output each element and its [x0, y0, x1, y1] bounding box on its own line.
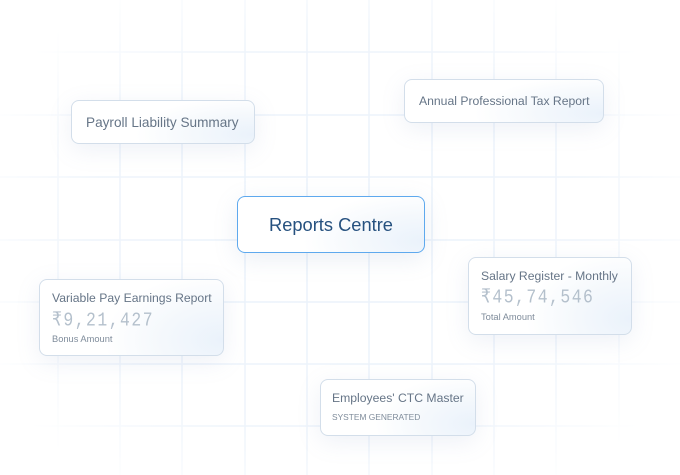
card subtitle: SYSTEM GENERATED: [332, 412, 420, 422]
amount label: Total Amount: [481, 312, 535, 322]
card title: Employees' CTC Master: [332, 391, 464, 405]
card title: Annual Professional Tax Report: [419, 94, 590, 108]
card: Payroll Liability Summary: [71, 100, 255, 144]
card: Annual Professional Tax Report: [404, 79, 604, 123]
card title: Salary Register - Monthly: [481, 269, 618, 283]
card: Variable Pay Earnings Report: [39, 279, 224, 356]
amount: ₹45,74,546: [481, 286, 594, 309]
heading: Reports Centre: [269, 214, 393, 235]
card: Salary Register - Monthly: [468, 257, 632, 335]
amount label: Bonus Amount: [52, 334, 112, 344]
amount: ₹9,21,427: [52, 309, 154, 332]
card title: Payroll Liability Summary: [86, 115, 239, 130]
card: Reports Centre: [237, 196, 425, 253]
card: Employees' CTC Master: [320, 379, 476, 436]
card title: Variable Pay Earnings Report: [52, 291, 212, 305]
